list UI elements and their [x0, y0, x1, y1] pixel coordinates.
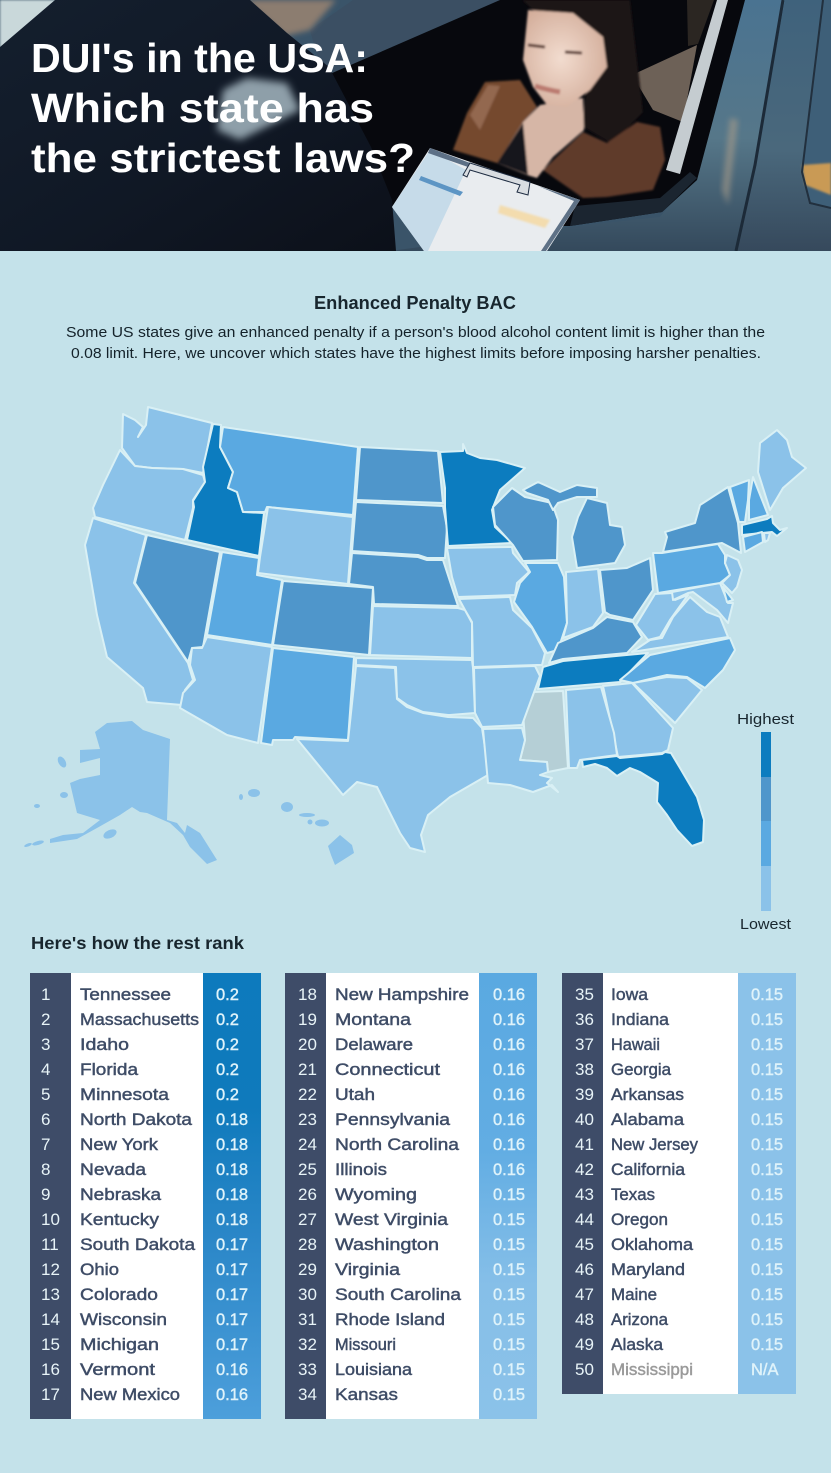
ranking column 3: Mississippi — [611, 1361, 693, 1379]
ranking column 2: North Carolina — [335, 1136, 460, 1154]
ranking column 2: Illinois — [335, 1161, 387, 1179]
state: Oklahoma — [356, 658, 475, 715]
ranking column 3: 49 — [575, 1335, 594, 1354]
state: Kansas — [370, 606, 472, 658]
legend colour scale — [761, 732, 771, 911]
ranking column 1: New Mexico — [80, 1386, 180, 1404]
state: North Dakota — [356, 447, 443, 503]
ranking column 2: Kansas — [335, 1386, 398, 1404]
ranking column 1: 0.18 — [216, 1211, 248, 1229]
ranking column 2: 19 — [298, 1010, 317, 1029]
ranking column 1: Wisconsin — [80, 1311, 167, 1329]
ranking column 3: Maine — [611, 1286, 657, 1304]
ranking column 1: 0.2 — [216, 1011, 239, 1029]
ranking column 1: Vermont — [80, 1361, 156, 1379]
ranking column 1: 0.18 — [216, 1186, 248, 1204]
ranking column 1: Kentucky — [80, 1211, 160, 1229]
ranking column 2: Rhode Island — [335, 1311, 445, 1329]
ranking column 3 — [562, 973, 796, 1394]
section heading: Enhanced Penalty BAC — [314, 293, 516, 313]
ranking column 2: 0.15 — [493, 1361, 525, 1379]
ranking column 3: 46 — [575, 1260, 594, 1279]
ranking column 2: Montana — [335, 1011, 412, 1029]
ranking column 1: 0.18 — [216, 1136, 248, 1154]
state: South Carolina — [633, 677, 702, 723]
ranking column 2: 33 — [298, 1360, 317, 1379]
ranking column 3: Hawaii — [611, 1036, 660, 1054]
state: Georgia — [603, 683, 673, 757]
ranking column 1: 0.17 — [216, 1311, 248, 1329]
ranking column 3: 36 — [575, 1010, 594, 1029]
ranking column 2: 22 — [298, 1085, 317, 1104]
state: Utah — [207, 552, 282, 645]
state: Hawaii — [239, 789, 354, 865]
ranking column 1: 13 — [41, 1285, 60, 1304]
ranking column 3: 0.15 — [751, 1186, 783, 1204]
ranking column 1: Nevada — [80, 1161, 147, 1179]
table heading: Here's how the rest rank — [31, 933, 244, 953]
state: Nevada — [135, 535, 220, 662]
state: New Jersey — [722, 555, 742, 593]
map of the USA — [85, 407, 806, 852]
title: the strictest laws? — [31, 135, 415, 181]
ranking column 3: Texas — [611, 1186, 655, 1204]
ranking column 1: 0.2 — [216, 1086, 239, 1104]
legend — [737, 711, 795, 933]
ranking column 3: Oklahoma — [611, 1236, 694, 1254]
state: Kentucky — [549, 617, 642, 663]
ranking column 2: 0.15 — [493, 1336, 525, 1354]
ranking column 3: 40 — [575, 1110, 594, 1129]
state: Maine — [758, 430, 806, 510]
ranking column 1: 5 — [41, 1085, 50, 1104]
ranking column 2: 26 — [298, 1185, 317, 1204]
state: Massachusetts — [742, 516, 787, 536]
state: Alabama — [566, 687, 617, 768]
ranking column 2: 0.15 — [493, 1211, 525, 1229]
ranking column 3: Maryland — [611, 1261, 685, 1279]
state: Mississippi — [520, 691, 568, 772]
legend label: lowest: Lowest — [740, 916, 792, 933]
ranking column 1: Nebraska — [80, 1186, 162, 1204]
ranking column 3: 0.15 — [751, 1286, 783, 1304]
ranking column 2: 34 — [298, 1385, 317, 1404]
ranking column 2: 0.16 — [493, 1086, 525, 1104]
ranking column 3: Iowa — [611, 986, 649, 1004]
ranking column 3: 0.15 — [751, 1111, 783, 1129]
ranking column 1: Massachusetts — [80, 1011, 199, 1029]
ranking column 3: 44 — [575, 1210, 594, 1229]
state: New Hampshire — [749, 477, 768, 520]
ranking column 3: Oregon — [611, 1211, 668, 1229]
ranking column 3: 0.15 — [751, 1211, 783, 1229]
ranking column 3: 43 — [575, 1185, 594, 1204]
ranking column 1: 17 — [41, 1385, 60, 1404]
ranking column 1: 0.17 — [216, 1336, 248, 1354]
ranking column 3: 0.15 — [751, 1136, 783, 1154]
ranking column 3: New Jersey — [611, 1136, 699, 1154]
intro text — [66, 325, 765, 362]
ranking column 1: 0.17 — [216, 1236, 248, 1254]
state: Rhode Island — [764, 533, 770, 542]
state: Connecticut — [743, 532, 763, 552]
state: Alaska — [24, 721, 217, 864]
ranking column 1: 16 — [41, 1360, 60, 1379]
ranking column 2: South Carolina — [335, 1286, 462, 1304]
ranking column 3: 35 — [575, 985, 594, 1004]
ranking column 3: 0.15 — [751, 1336, 783, 1354]
state: Virginia — [632, 597, 728, 652]
ranking column 1: Michigan — [80, 1336, 159, 1354]
ranking column 2: 0.15 — [493, 1236, 525, 1254]
ranking column 1: 0.18 — [216, 1161, 248, 1179]
ranking column 2 — [285, 973, 537, 1419]
ranking column 1: 8 — [41, 1160, 50, 1179]
ranking column 1: North Dakota — [80, 1111, 193, 1129]
title: DUI's in the USA: — [31, 35, 368, 81]
ranking column 1: 6 — [41, 1110, 50, 1129]
ranking column 2: 0.16 — [493, 1011, 525, 1029]
ranking column 1: 0.17 — [216, 1286, 248, 1304]
ranking column 1: Tennessee — [80, 986, 171, 1004]
ranking column 3: 42 — [575, 1160, 594, 1179]
state: Minnesota — [440, 444, 525, 546]
ranking column 1: 7 — [41, 1135, 50, 1154]
ranking column 2: Delaware — [335, 1036, 413, 1054]
state: Ohio — [600, 558, 653, 620]
ranking column 2: Louisiana — [335, 1361, 413, 1379]
ranking column 2: 32 — [298, 1335, 317, 1354]
state: Colorado — [273, 581, 373, 655]
state: Pennsylvania — [653, 544, 730, 593]
state: Maryland — [672, 583, 733, 623]
ranking column 1: 1 — [41, 985, 50, 1004]
ranking column 2: Wyoming — [335, 1186, 417, 1204]
ranking column 1: 0.17 — [216, 1261, 248, 1279]
ranking column 1: Minnesota — [80, 1086, 170, 1104]
ranking column 2: 0.16 — [493, 986, 525, 1004]
state: Montana — [220, 427, 358, 515]
ranking column 2: West Virginia — [335, 1211, 449, 1229]
ranking column 3: 0.15 — [751, 1161, 783, 1179]
ranking column 2: 27 — [298, 1210, 317, 1229]
state: Louisiana — [483, 728, 558, 792]
state: North Carolina — [620, 638, 735, 688]
ranking column 1: Florida — [80, 1061, 139, 1079]
ranking column 1: 0.18 — [216, 1111, 248, 1129]
ranking column 2: 0.16 — [493, 1161, 525, 1179]
ranking column 3: 0.15 — [751, 1061, 783, 1079]
state: Vermont — [730, 480, 749, 522]
ranking column 3: Indiana — [611, 1011, 670, 1029]
ranking column 2: 0.15 — [493, 1261, 525, 1279]
ranking column 2: 28 — [298, 1235, 317, 1254]
ranking column 2: Pennsylvania — [335, 1111, 451, 1129]
ranking column 3: 0.15 — [751, 986, 783, 1004]
ranking column 3: 45 — [575, 1235, 594, 1254]
ranking column 2: 31 — [298, 1310, 317, 1329]
ranking column 1: 2 — [41, 1010, 50, 1029]
ranking column 2: 30 — [298, 1285, 317, 1304]
state: Iowa — [447, 547, 529, 597]
ranking column 2: New Hampshire — [335, 986, 469, 1004]
ranking column 3: Alabama — [611, 1111, 685, 1129]
ranking column 1: 4 — [41, 1060, 50, 1079]
state: Illinois — [514, 563, 567, 653]
ranking column 1: 12 — [41, 1260, 60, 1279]
state: Wyoming — [258, 507, 353, 584]
ranking column 1: 14 — [41, 1310, 60, 1329]
state: Delaware — [723, 587, 733, 602]
ranking column 3: 48 — [575, 1310, 594, 1329]
ranking column 3: 37 — [575, 1035, 594, 1054]
state: New York — [663, 487, 741, 553]
ranking column 1: 0.16 — [216, 1361, 248, 1379]
state: Arkansas — [474, 666, 540, 727]
state: West Virginia — [636, 593, 688, 640]
ranking column 2: 0.16 — [493, 1061, 525, 1079]
ranking column 1: New York — [80, 1136, 159, 1154]
ranking column 1: 0.2 — [216, 986, 239, 1004]
ranking column 3: 0.15 — [751, 1086, 783, 1104]
ranking column 3: 50 — [575, 1360, 594, 1379]
ranking column 3: Alaska — [611, 1336, 664, 1354]
state: Nebraska — [349, 553, 458, 606]
ranking column 1: 10 — [41, 1210, 60, 1229]
ranking column 2: 18 — [298, 985, 317, 1004]
ranking column 1: 15 — [41, 1335, 60, 1354]
state: Florida — [582, 752, 704, 846]
ranking column 1: 0.16 — [216, 1386, 248, 1404]
ranking column 2: 0.16 — [493, 1036, 525, 1054]
ranking column 1: Ohio — [80, 1261, 119, 1279]
ranking column 2: 24 — [298, 1135, 317, 1154]
ranking column 2: Connecticut — [335, 1061, 440, 1079]
ranking column 3: 0.15 — [751, 1261, 783, 1279]
ranking column 3: Arizona — [611, 1311, 669, 1329]
ranking column 2: 0.15 — [493, 1186, 525, 1204]
ranking column 3: 0.15 — [751, 1011, 783, 1029]
ranking column 1: Idaho — [80, 1036, 129, 1054]
ranking column 3: 41 — [575, 1135, 594, 1154]
state: Oregon — [93, 450, 205, 540]
ranking column 3: 0.15 — [751, 1311, 783, 1329]
state: South Dakota — [352, 502, 447, 558]
state: Arizona — [180, 637, 272, 743]
state: California — [85, 518, 193, 705]
ranking column 1: 9 — [41, 1185, 50, 1204]
ranking column 3: 39 — [575, 1085, 594, 1104]
ranking column 2: 0.16 — [493, 1111, 525, 1129]
ranking column 1: 3 — [41, 1035, 50, 1054]
state: Indiana — [563, 569, 603, 638]
state: Idaho — [187, 424, 264, 556]
ranking column 1 — [30, 973, 261, 1419]
state: Michigan — [523, 482, 625, 568]
state: New Mexico — [261, 648, 354, 745]
header photo: officer and driver — [0, 0, 831, 251]
ranking column 2: 21 — [298, 1060, 317, 1079]
ranking column 2: 25 — [298, 1160, 317, 1179]
intro text: Some US states give an enhanced penalty if a person's blood alcohol content limit is higher than the — [66, 325, 765, 341]
title: Which state has — [31, 85, 374, 131]
ranking column 2: Washington — [335, 1236, 439, 1254]
ranking column 2: 0.15 — [493, 1386, 525, 1404]
ranking column 3: Arkansas — [611, 1086, 684, 1104]
ranking column 1: 0.2 — [216, 1036, 239, 1054]
ranking column 3: Georgia — [611, 1061, 672, 1079]
ranking column 2: 23 — [298, 1110, 317, 1129]
ranking column 1: 11 — [41, 1235, 59, 1254]
ranking column 3: 0.15 — [751, 1236, 783, 1254]
intro text: 0.08 limit. Here, we uncover which states have the highest limits before imposing harsher penalties. — [71, 346, 761, 362]
legend label: highest: Highest — [737, 711, 795, 728]
ranking column 3: California — [611, 1161, 686, 1179]
ranking column 2: Virginia — [335, 1261, 401, 1279]
ranking column 2: 20 — [298, 1035, 317, 1054]
ranking column 2: 29 — [298, 1260, 317, 1279]
ranking column 1: 0.2 — [216, 1061, 239, 1079]
ranking column 3: N/A — [751, 1361, 779, 1379]
ranking column 2: 0.15 — [493, 1311, 525, 1329]
ranking column 2: 0.15 — [493, 1286, 525, 1304]
state: Tennessee — [538, 653, 648, 689]
ranking column 3: 0.15 — [751, 1036, 783, 1054]
ranking column 3: 47 — [575, 1285, 594, 1304]
ranking column 1: South Dakota — [80, 1236, 196, 1254]
state: Texas — [297, 666, 488, 852]
state: Wisconsin — [493, 488, 558, 561]
state: Missouri — [459, 597, 545, 667]
ranking column 2: Utah — [335, 1086, 375, 1104]
state: Washington — [122, 407, 212, 473]
ranking column 2: 0.16 — [493, 1136, 525, 1154]
ranking column 2: Missouri — [335, 1336, 396, 1354]
title — [31, 35, 415, 181]
ranking column 1: Colorado — [80, 1286, 158, 1304]
ranking column 3: 38 — [575, 1060, 594, 1079]
